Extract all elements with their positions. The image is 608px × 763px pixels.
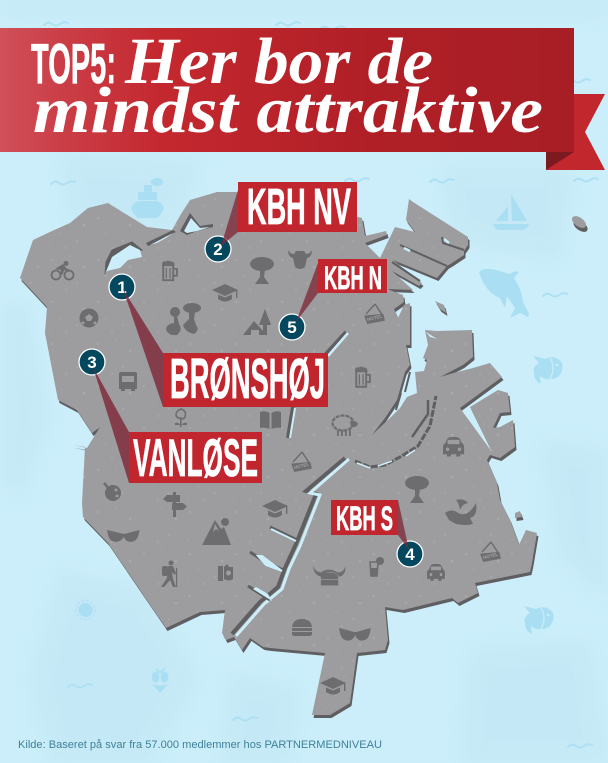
icon: beer 2 [355,367,370,387]
icon: tree 2 [405,476,429,503]
callout 1: BRØNSHØJ [109,274,328,411]
callout 5: KBH N: 5 [287,318,297,337]
callout 2: KBH NV: KBH NV [247,178,351,235]
callout 3: VANLØSE: 3 [87,353,97,372]
icon: flower [175,409,187,427]
icon: sailboat [493,194,529,230]
callout 4: KBH S [331,500,423,567]
banner body [0,28,574,152]
ribbon fold [546,152,574,170]
callout 2: KBH NV [205,178,357,262]
icon: whale [479,269,529,318]
icon: fish south [524,606,554,634]
map icons [52,250,501,694]
callout 3: VANLØSE: VANLØSE [133,429,258,488]
icon: car 1 [443,437,464,456]
icon: drink [370,557,384,576]
icon: sun [76,600,95,620]
icon: soccer ball [80,308,98,328]
callout 4: KBH S: 4 [405,545,415,564]
icon: hotel sign 3 [480,542,501,563]
callout 5: KBH N [279,259,387,340]
icon: tree [250,257,274,284]
icon: beer [162,261,177,280]
icon: viking helmet [313,566,345,585]
icon: backpack [218,564,233,581]
source note: Kilde: Baseret på svar fra 57.000 medlemmer hos PARTNERMEDNIVEAU [18,739,382,751]
text: BRØNSHØJ [170,347,325,411]
icon: house and tree [243,309,271,335]
icon: cyclist [52,261,74,280]
map land [20,192,588,715]
icon: graduation cap [212,284,238,302]
icon: fish east [533,356,562,384]
icon: mountain [202,518,231,545]
map of Copenhagen [20,192,590,718]
icon: palette [104,483,121,501]
callout 3: VANLØSE [79,349,262,488]
icon: hotel sign 1 [291,452,312,473]
callout 4: KBH S: KBH S [336,500,393,538]
icon: bus [119,372,137,391]
ribbon tail [540,94,605,170]
title text: TOP5: [31,32,116,96]
icon: graduation cap 2 [320,677,346,694]
map shadow [22,195,590,718]
icon: bikini [152,667,168,693]
icon: trees couple [166,303,201,335]
title banner: mindst attraktive [33,74,543,147]
icon: hotel sign 2 [364,304,385,325]
icon: graduation cap 3 [262,500,288,518]
icon: cow [288,250,312,269]
icon: mermaid [445,499,476,525]
icon: ship [131,178,164,218]
callout 1: BRØNSHØJ: 1 [117,278,127,297]
title banner [0,25,605,170]
icon: sheep [332,416,358,436]
icon: car 2 [427,564,445,581]
inlets and channels [105,213,464,636]
callout 2: KBH NV: 2 [213,240,223,259]
icon: hiker [161,560,177,587]
icon: sunglasses 2 [339,628,371,641]
title banner: Her bor de [124,25,433,98]
icon: burger [292,619,312,636]
callout 5: KBH N: KBH N [324,260,382,296]
icon: book [260,411,281,429]
icon: signpost [163,492,187,517]
icon: sunglasses 1 [107,530,140,542]
